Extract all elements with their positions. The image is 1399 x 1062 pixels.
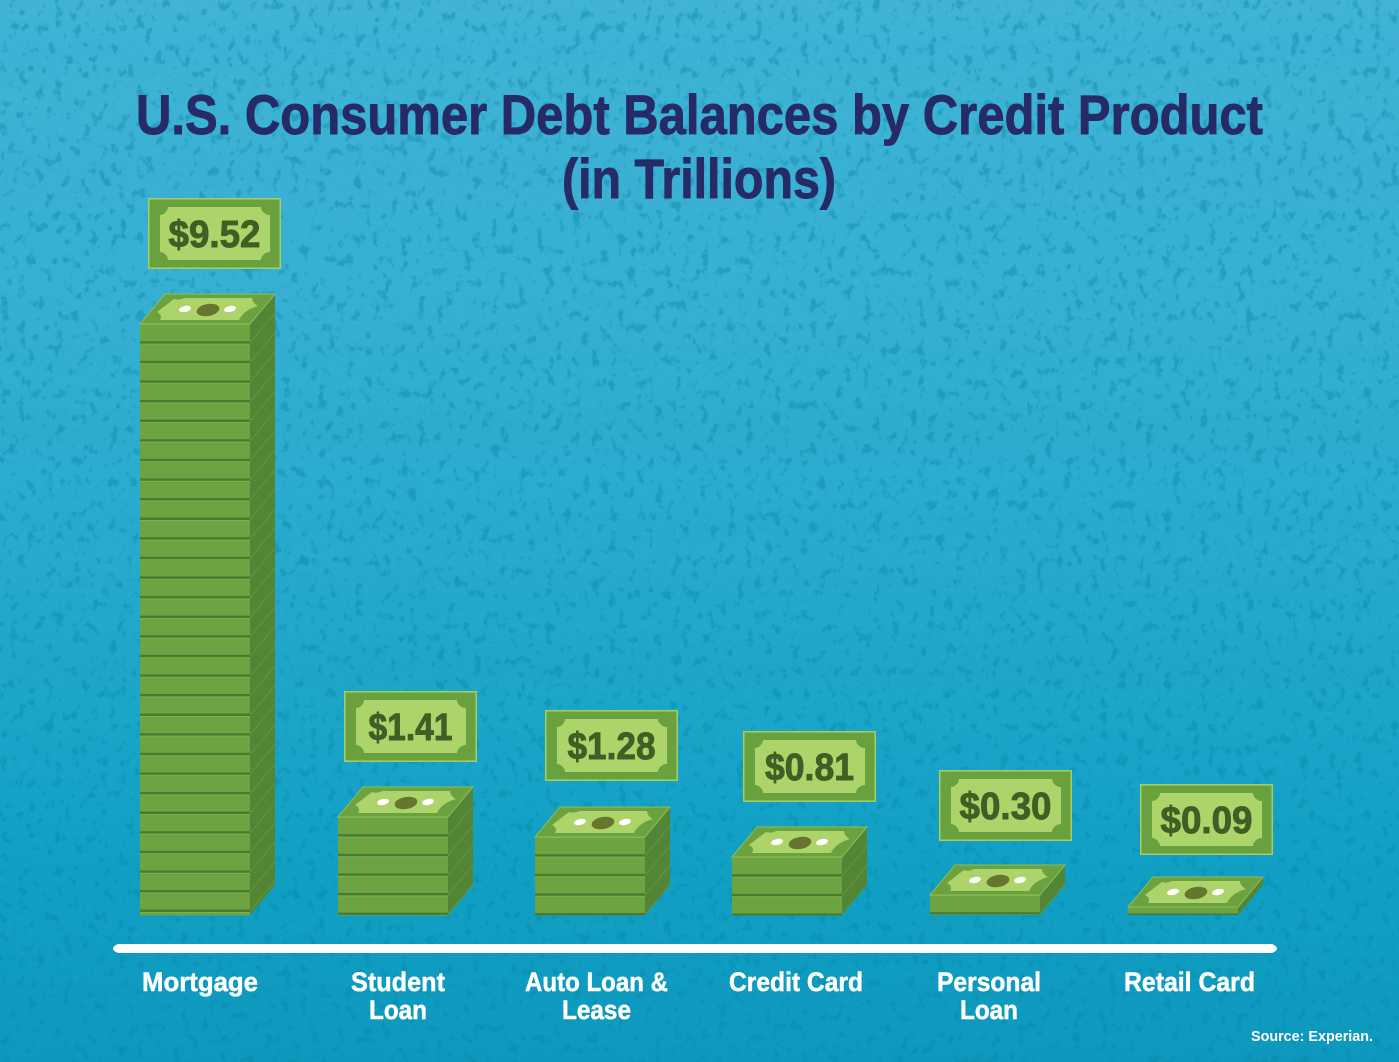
- category label: Auto Loan and Lease: Auto Loan &: [525, 967, 668, 997]
- bill label: $1.41: [345, 692, 476, 761]
- category label: Student Loan: Student: [351, 967, 445, 997]
- bill label: $0.09: [1141, 785, 1272, 854]
- column: Student Loan: [338, 692, 476, 916]
- category label: Retail Card: Retail Card: [1124, 967, 1255, 997]
- bill label: $1.28: [546, 711, 677, 780]
- category label: Mortgage: Mortgage: [142, 967, 258, 997]
- category label: Credit Card: Credit Card: [729, 967, 863, 997]
- money stack: Credit Card: [732, 827, 867, 916]
- money stack: Retail Card: [1128, 877, 1263, 915]
- bill label: $0.30: $0.30: [960, 786, 1052, 828]
- money stack: Personal Loan: [930, 865, 1065, 915]
- bill label: $1.41: $1.41: [368, 707, 452, 749]
- bill label: $9.52: $9.52: [168, 214, 260, 256]
- bill label: $0.81: [744, 732, 875, 801]
- baseline axis: [113, 944, 1277, 953]
- title: U.S. Consumer Debt Balances by Credit Product: [136, 83, 1263, 146]
- bill label: $0.09: $0.09: [1160, 800, 1252, 842]
- column: Credit Card: [732, 732, 875, 916]
- category label: Personal Loan: Personal: [937, 967, 1041, 997]
- column: Auto Loan and Lease: [535, 711, 677, 916]
- category label: Personal Loan: [937, 967, 1041, 1025]
- bill label: $0.81: $0.81: [765, 747, 854, 789]
- category label: Auto Loan and Lease: Lease: [562, 995, 631, 1025]
- category label: Auto Loan and Lease: [525, 967, 668, 1025]
- column: Personal Loan: [930, 771, 1071, 915]
- source note: Source: Experian.: [1251, 1029, 1373, 1045]
- money stack: Student Loan: [338, 787, 473, 916]
- category label: Student Loan: Loan: [369, 995, 427, 1025]
- money stack: Auto Loan and Lease: [535, 807, 670, 916]
- title: (in Trillions): [562, 147, 836, 210]
- category label: Student Loan: [351, 967, 445, 1025]
- column: Retail Card: [1128, 785, 1272, 915]
- category label: Personal Loan: Loan: [960, 995, 1018, 1025]
- bill label: $1.28: $1.28: [568, 726, 656, 768]
- bill label: $0.30: [940, 771, 1071, 840]
- bill label: $9.52: [149, 199, 280, 268]
- column: Mortgage: [140, 199, 280, 916]
- money stack: Mortgage: [140, 294, 275, 916]
- title: [136, 83, 1263, 210]
